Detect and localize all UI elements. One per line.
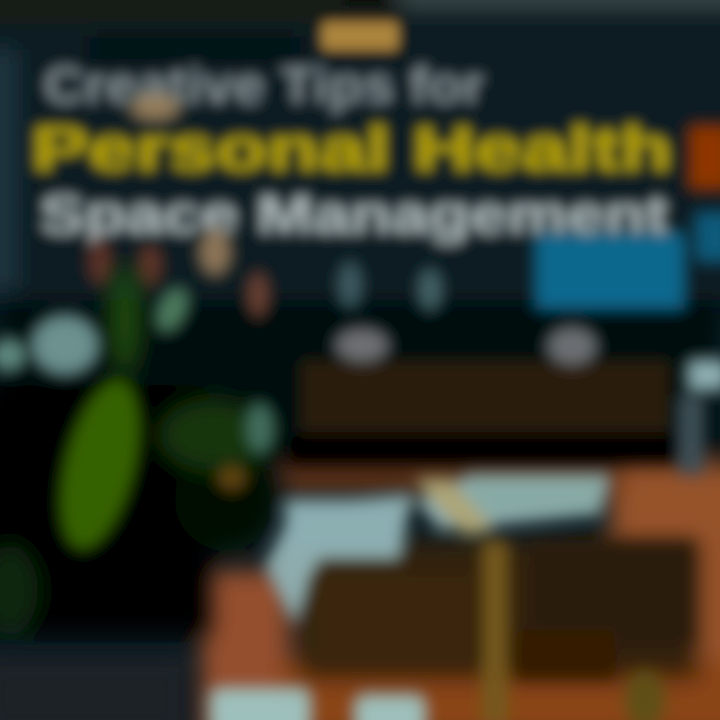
table base left bbox=[312, 575, 472, 665]
table leg bbox=[482, 540, 508, 720]
title line 1: Creative Tips for bbox=[44, 57, 484, 115]
title bbox=[32, 57, 672, 245]
title line 3: Space Management bbox=[40, 185, 668, 245]
pendant lamp bbox=[322, 0, 398, 50]
title accents bbox=[129, 94, 720, 190]
plant pot bbox=[0, 655, 190, 720]
flowers bbox=[88, 228, 269, 319]
table base right bbox=[530, 540, 695, 645]
highlights on leaves bbox=[0, 282, 274, 492]
small plant, lower right bbox=[625, 670, 665, 720]
rug bbox=[265, 475, 610, 625]
title line 2: Personal Health bbox=[32, 115, 672, 184]
lower rug patches bbox=[210, 688, 425, 720]
large green leaf bbox=[44, 371, 156, 559]
rug and coffee table bbox=[210, 475, 695, 720]
dark foliage bbox=[0, 265, 275, 635]
sofa pillows and cushions bbox=[334, 212, 720, 475]
potted plant bbox=[0, 265, 275, 720]
sofa bbox=[290, 360, 680, 465]
